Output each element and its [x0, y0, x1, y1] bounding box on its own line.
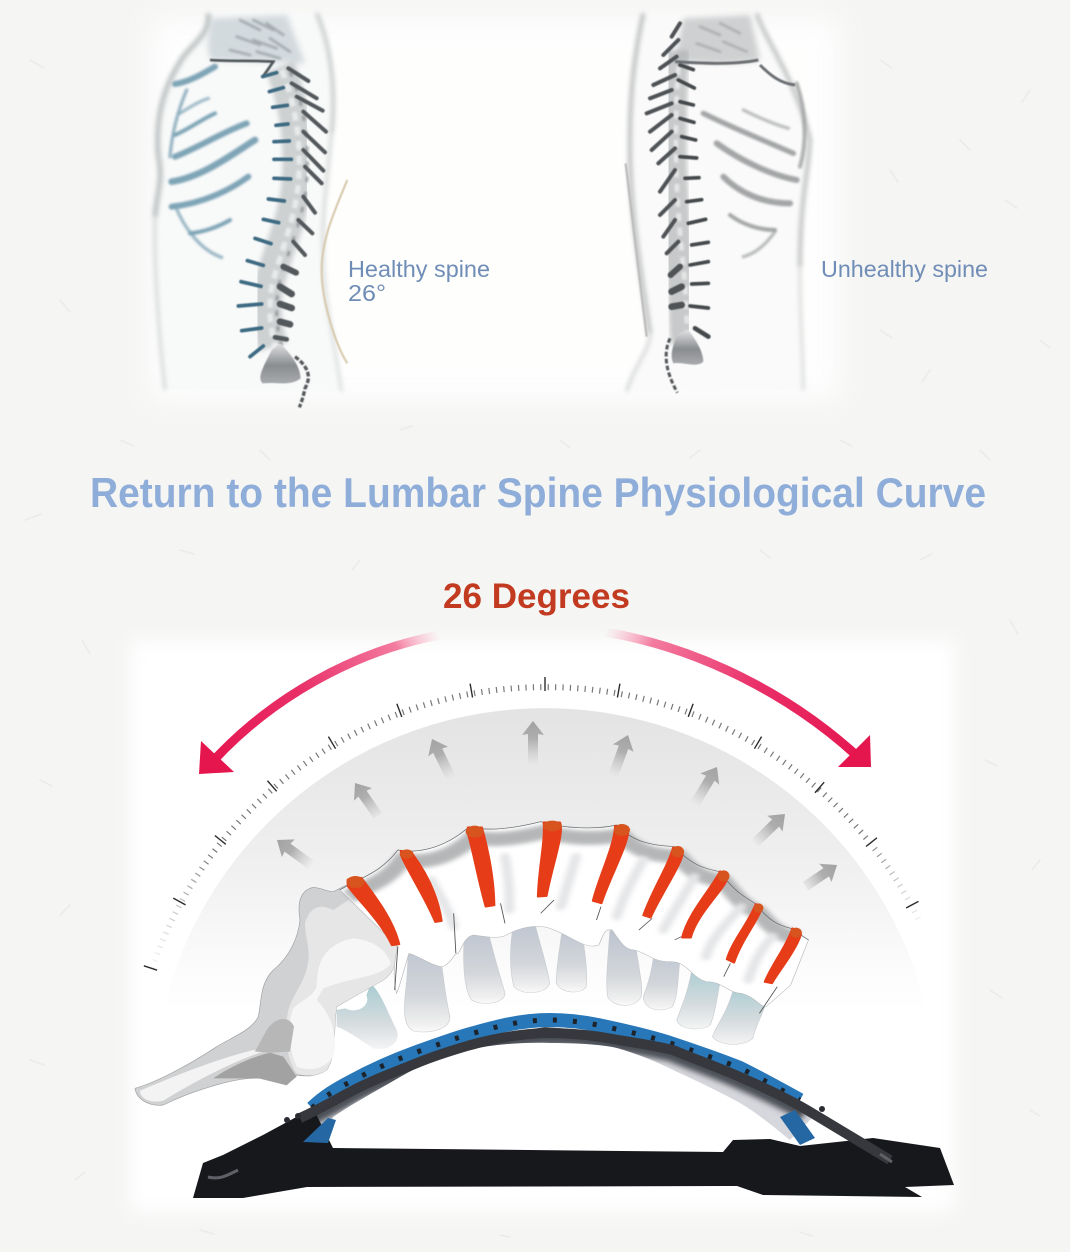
foot details — [208, 1154, 892, 1178]
blue massage band — [312, 1020, 800, 1108]
lumbar vertebrae — [340, 821, 809, 1044]
label: 26 degrees: 26° — [348, 280, 386, 306]
spinous processes — [275, 68, 326, 339]
sacrum mid patch — [255, 1019, 294, 1053]
sacrum highlight — [289, 938, 391, 1069]
ribs — [703, 83, 805, 257]
top edge shading — [349, 832, 797, 938]
heading: 26 degrees: 26 Degrees — [443, 577, 630, 616]
straight back line — [626, 163, 647, 337]
massage studs — [312, 1020, 800, 1108]
spinous process lobes — [404, 920, 771, 1044]
label: unhealthy spine: Unhealthy spine — [821, 256, 988, 282]
torso edges — [627, 13, 810, 392]
illustration: unhealthy spine figure — [626, 13, 810, 393]
dark arch — [300, 1033, 890, 1160]
disc-side shading — [431, 857, 773, 980]
sacrum light layer — [286, 897, 397, 1076]
upper chest mottling — [675, 15, 760, 63]
column facets — [676, 67, 687, 340]
blue side clips — [303, 1110, 815, 1145]
vertebral bodies — [678, 65, 708, 337]
clavicle — [675, 60, 795, 85]
arch underside — [316, 1027, 812, 1140]
coccyx shadow — [213, 1053, 297, 1085]
shoulder line — [210, 60, 273, 76]
panel: top white backing — [150, 18, 840, 400]
angle scale — [144, 677, 919, 970]
illustration: healthy spine figure — [155, 13, 347, 407]
column facets — [270, 70, 299, 347]
disc caps — [347, 821, 802, 938]
title: Return to the Lumbar Spine Physiological Curve — [90, 469, 986, 516]
grey dome — [164, 708, 926, 1010]
lumbar curve line — [322, 180, 347, 363]
upper chest mottling — [208, 15, 305, 63]
torso fill — [627, 13, 810, 392]
sacrum — [672, 330, 703, 365]
black base — [193, 1108, 954, 1198]
coccyx light — [140, 1050, 263, 1102]
spinal column mass — [672, 50, 685, 343]
sacrum and coccyx — [135, 883, 398, 1105]
side studs — [284, 1106, 825, 1123]
ribs — [170, 67, 255, 257]
intervertebral discs — [348, 822, 801, 983]
vertebral bodies and joints — [340, 822, 809, 1007]
torso fill — [155, 13, 342, 392]
grey expansion arrows — [271, 721, 843, 895]
minor ticks — [152, 687, 919, 968]
first spinous lobe — [337, 983, 398, 1049]
joint outlines — [395, 900, 777, 1013]
vertebral bodies — [238, 73, 291, 357]
spinal column mass — [267, 67, 298, 347]
illustration: lumbar stretcher device — [193, 1020, 954, 1198]
arrow: right pink curved — [605, 632, 871, 767]
sacrum — [260, 343, 301, 383]
upper spine ghost processes — [230, 20, 290, 58]
top edge outline — [340, 822, 809, 940]
panel: bottom white backing — [130, 640, 955, 1212]
upper chest ghost marks — [697, 23, 747, 52]
sacral foramen — [339, 988, 367, 1010]
torso edges — [155, 13, 342, 392]
coccyx — [666, 338, 677, 393]
label: healthy spine: Healthy spine — [348, 256, 490, 282]
arrow: left pink curved — [199, 635, 440, 774]
major ticks — [144, 677, 918, 970]
coccyx — [295, 357, 308, 407]
sacrum body — [135, 883, 397, 1105]
spinous processes — [647, 23, 682, 307]
illustration: lumbar spine model — [135, 821, 809, 1105]
